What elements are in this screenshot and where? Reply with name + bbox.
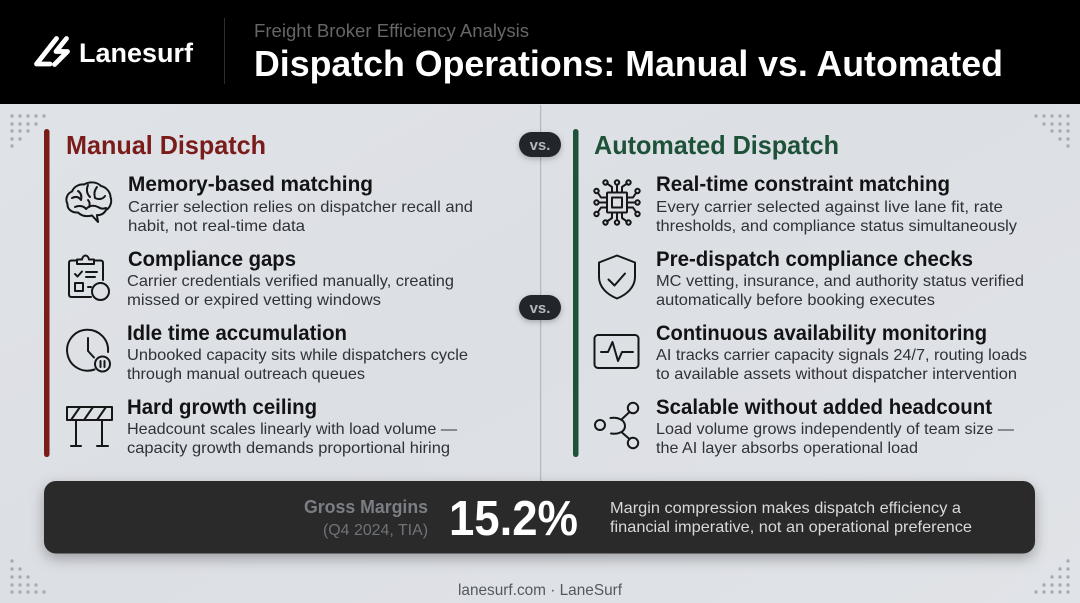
item description: Every carrier selected against live lane fit, rate — [656, 199, 1003, 216]
item: pre-dispatch compliance checks — [599, 248, 1024, 309]
item description — [127, 421, 457, 457]
icon: Lanesurf logo mark — [36, 38, 68, 64]
title: Dispatch Operations: Manual vs. Automated — [254, 43, 1003, 84]
footer: lanesurf.com · LaneSurf — [458, 582, 623, 599]
callout text: Margin compression makes dispatch efficiency a — [610, 500, 961, 517]
item title: Pre-dispatch compliance checks — [656, 248, 973, 271]
item description: through manual outreach queues — [127, 366, 365, 383]
item title: Memory-based matching — [128, 173, 373, 196]
item title: Scalable without added headcount — [656, 396, 992, 419]
item title: Compliance gaps — [128, 248, 296, 271]
item: compliance gaps — [69, 248, 454, 309]
item title: Hard growth ceiling — [127, 396, 317, 419]
item description: thresholds, and compliance status simultaneously — [656, 218, 1017, 235]
item: real-time constraint matching — [594, 173, 1017, 235]
icon: branching nodes — [595, 403, 638, 448]
item description — [656, 273, 1024, 309]
item description: MC vetting, insurance, and authority status verified — [656, 273, 1024, 290]
item: idle time accumulation — [67, 322, 468, 383]
metric value: 15.2% — [449, 492, 578, 546]
panel: manual dispatch — [44, 129, 473, 457]
item description: Headcount scales linearly with load volume — — [127, 421, 457, 438]
metric source: (Q4 2024, TIA) — [323, 522, 428, 539]
icon: circuit chip — [594, 180, 640, 225]
item description: Carrier credentials verified manually, creating — [127, 273, 454, 290]
vs badge top — [519, 132, 561, 157]
item description: Load volume grows independently of team size — — [656, 421, 1014, 438]
heading: manual dispatch: Manual Dispatch — [66, 130, 266, 160]
logo wordmark: Lanesurf — [79, 38, 194, 68]
panel: automated dispatch — [573, 129, 1027, 457]
item description: Unbooked capacity sits while dispatchers cycle — [127, 347, 468, 364]
decorative dots top right — [1034, 114, 1070, 148]
item description: Carrier selection relies on dispatcher recall and — [128, 199, 473, 216]
item description — [656, 199, 1017, 235]
vs badge middle — [519, 295, 561, 320]
icon: clock with pause — [67, 330, 110, 372]
icon: road barrier — [67, 407, 112, 446]
item description: AI tracks carrier capacity signals 24/7, routing loads — [656, 347, 1027, 364]
item title: Continuous availability monitoring — [656, 322, 987, 345]
heading: automated dispatch: Automated Dispatch — [594, 130, 839, 160]
metric label: Gross Margins — [304, 497, 428, 517]
item description — [656, 421, 1014, 457]
decorative dots top left — [10, 114, 46, 148]
item description: capacity growth demands proportional hiring — [127, 440, 450, 457]
header band — [0, 0, 1080, 104]
item description: to available assets without dispatcher intervention — [656, 366, 1017, 383]
item description: automatically before booking executes — [656, 292, 935, 309]
callout text: financial imperative, not an operational preference — [610, 519, 972, 536]
item: hard growth ceiling — [67, 396, 457, 457]
item: scalable without added headcount — [595, 396, 1014, 457]
item description: habit, not real-time data — [128, 218, 305, 235]
subtitle: Freight Broker Efficiency Analysis — [254, 21, 529, 41]
item description: missed or expired vetting windows — [127, 292, 381, 309]
icon: brain — [66, 182, 111, 222]
item description — [656, 347, 1027, 383]
callout text — [610, 500, 972, 536]
decorative dots bottom left — [10, 559, 46, 594]
vs badge top: vs. — [530, 137, 550, 154]
icon: shield check — [599, 256, 635, 298]
item title: Real-time constraint matching — [656, 173, 950, 196]
icon: pulse monitor — [594, 335, 638, 368]
item: continuous availability monitoring — [594, 322, 1027, 383]
item: memory-based matching — [66, 173, 473, 235]
icon: clipboard checklist — [69, 256, 109, 300]
vs badge middle: vs. — [530, 300, 550, 317]
item title: Idle time accumulation — [127, 322, 347, 345]
item description — [127, 347, 468, 383]
decorative dots bottom right — [1034, 559, 1070, 594]
item description — [128, 199, 473, 235]
item description — [127, 273, 454, 309]
item description: the AI layer absorbs operational load — [656, 440, 918, 457]
callout: gross margins bar — [44, 481, 1035, 554]
